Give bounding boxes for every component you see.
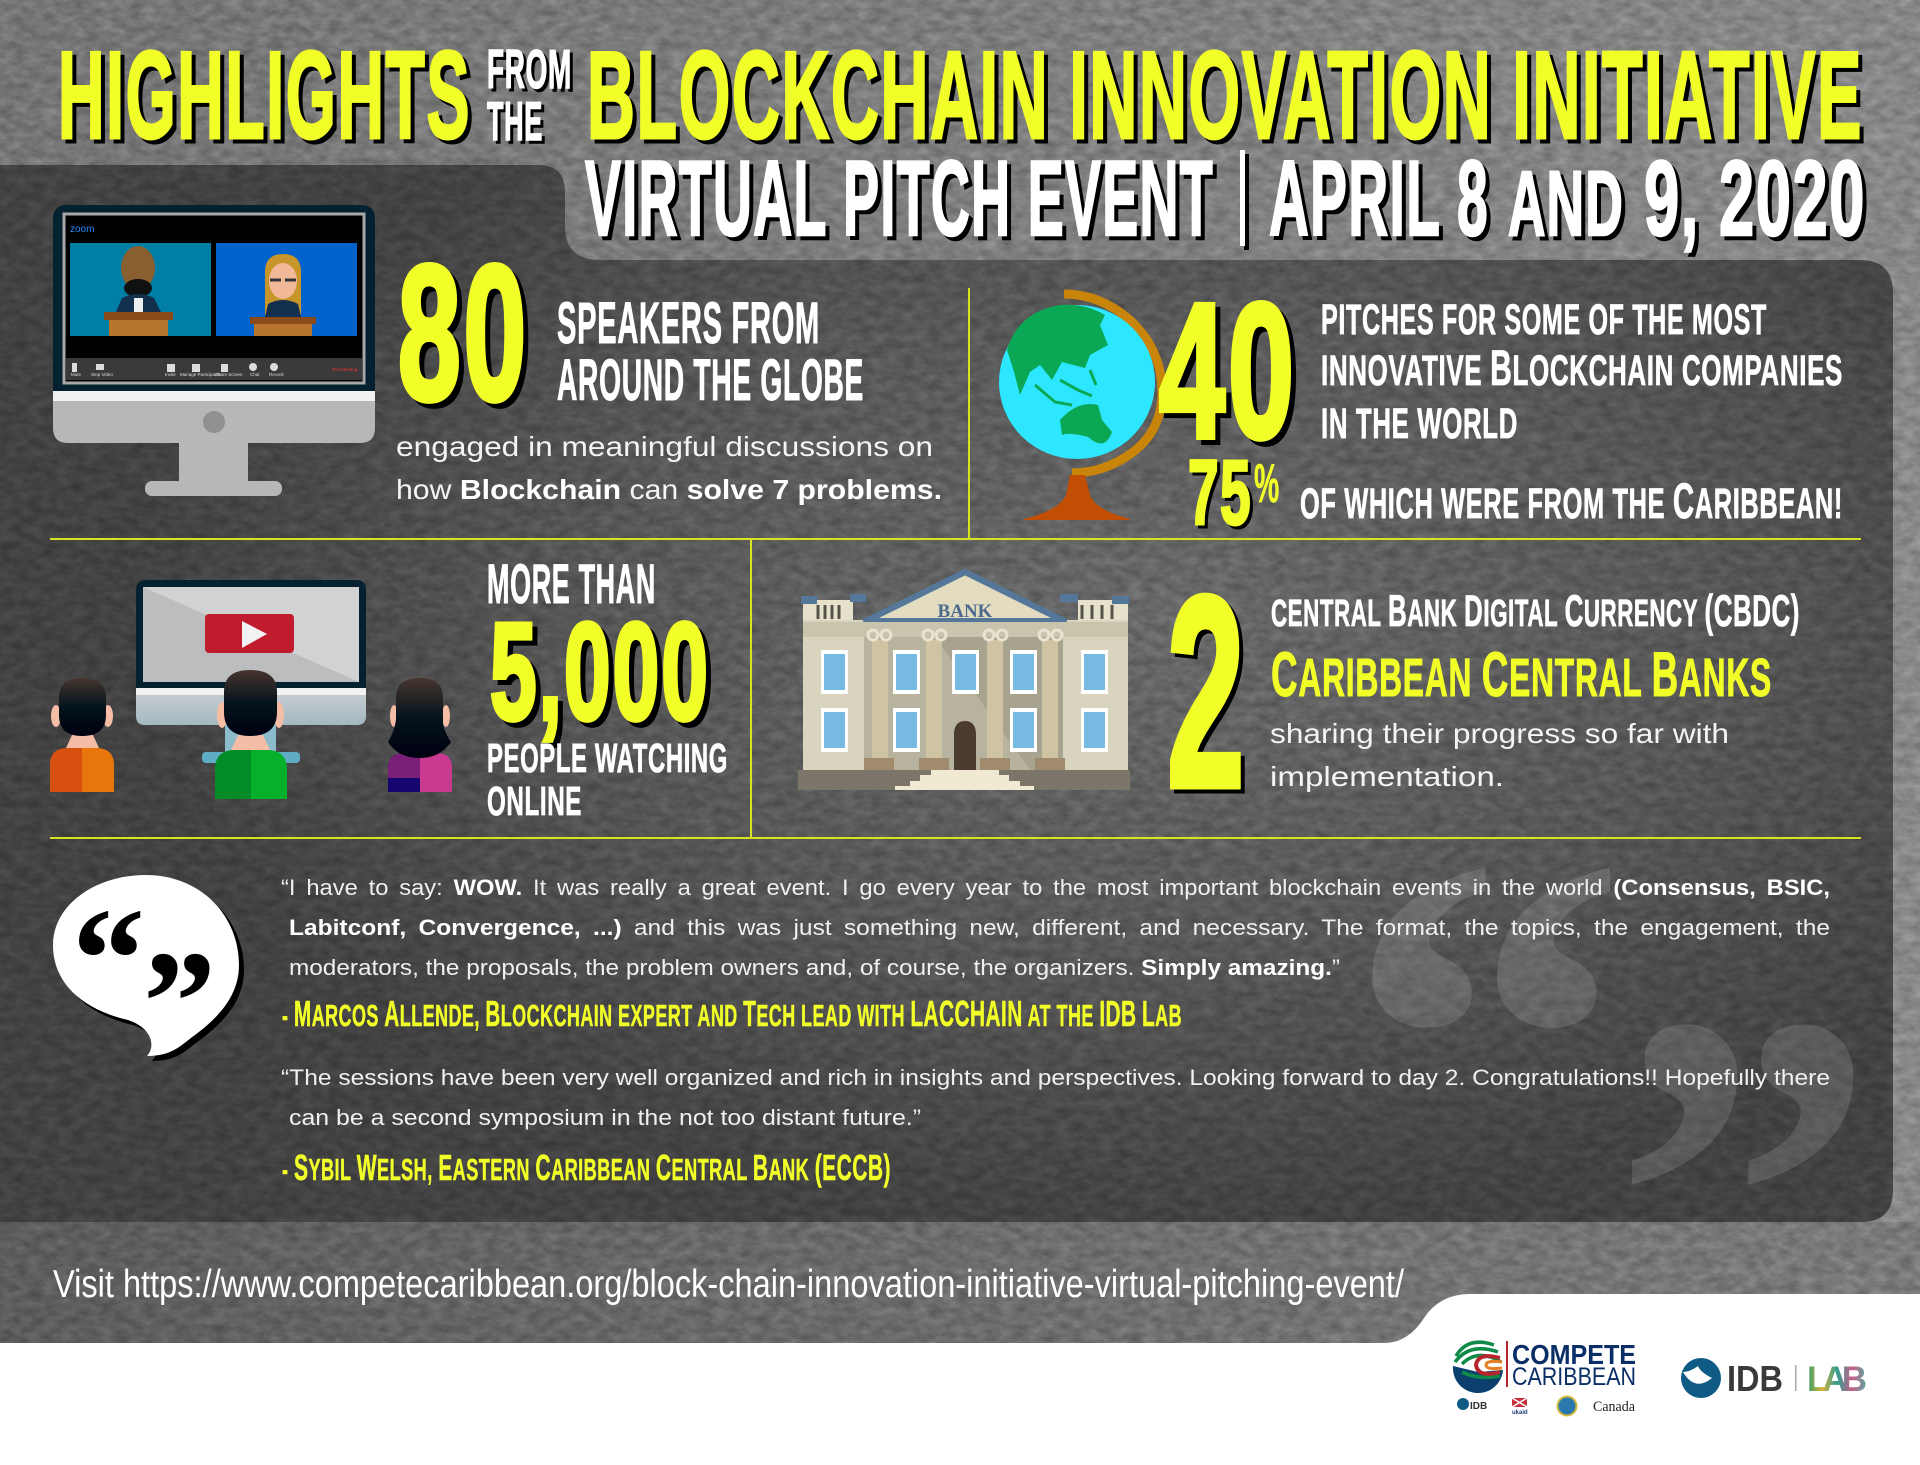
stat: 40 pitches: IN THE WORLD	[1321, 400, 1518, 448]
testimonial one: moderators, the proposals, the problem owners and, of course, the organizers. Simply amazing. ”	[289, 955, 1340, 980]
footer white area	[0, 1294, 1920, 1465]
icon: audience watching video	[50, 580, 452, 799]
icon: video call monitor	[53, 205, 375, 496]
stat: 75 percent	[1188, 442, 1843, 544]
logo: Compete Caribbean: COMPETE	[1512, 1339, 1636, 1370]
stat: 2 central bank digital currency: CARIBBEAN CENTRAL BANKS	[1271, 640, 1772, 710]
viewer left	[50, 678, 114, 792]
testimonial two: “The sessions have been very well organized and rich in insights and perspectives. Looking forward to day 2. Congratulations!! Hopefully there	[281, 1065, 1830, 1090]
icon: speech bubble quote	[53, 875, 239, 1083]
title: THE	[487, 90, 543, 152]
stat: 40 pitches	[1159, 263, 1843, 478]
toolbar labels: Chat	[250, 372, 260, 377]
viewer right	[388, 678, 452, 792]
toolbar labels: Mute	[71, 372, 82, 377]
toolbar labels: Share Screen	[215, 372, 243, 377]
title: FROM	[487, 38, 572, 100]
logo: IDB Lab: IDB	[1727, 1358, 1783, 1399]
speaker one	[104, 246, 173, 336]
testimonial two: can be a second symposium in the not too distant future.”	[289, 1105, 921, 1130]
toolbar labels	[71, 363, 358, 377]
testimonial one: “I have to say: WOW. It was really a great event. I go every year to the most important blockchain events in the world (Consensus, BSIC,	[281, 875, 1830, 900]
toolbar labels: Manage Participants	[180, 372, 222, 377]
stat: 2 central bank digital currency: implementation.	[1270, 761, 1504, 792]
toolbar labels: Invite	[165, 372, 176, 377]
title	[58, 27, 1863, 165]
testimonial one	[281, 875, 1830, 1034]
stat: 5,000 people: MORE THAN	[487, 552, 656, 615]
stat: 2 central bank digital currency	[1167, 540, 1800, 844]
icon: video call monitor: zoom	[70, 224, 94, 235]
dividers	[50, 288, 1861, 838]
partner logos: IDB	[1470, 1401, 1487, 1412]
icon: speech bubble quote: “	[72, 878, 145, 1040]
stat: 80 speakers: 80	[398, 225, 529, 440]
speaker two	[250, 254, 316, 336]
logo: Compete Caribbean	[1453, 1339, 1636, 1416]
logo: Compete Caribbean: CARIBBEAN	[1512, 1363, 1636, 1391]
stat: 40 pitches: 40	[1159, 263, 1297, 478]
toolbar labels: Stop Video	[91, 372, 113, 377]
icon: bank building: BANK	[938, 601, 993, 622]
subtitle: VIRTUAL PITCH EVENT	[585, 138, 1214, 258]
stat: 80 speakers: engaged in meaningful discussions on	[396, 431, 933, 462]
icon: bank building	[798, 572, 1130, 790]
stat: 5,000 people	[487, 552, 728, 824]
testimonial two	[281, 1065, 1830, 1188]
testimonial one: Labitconf, Convergence, ...) and this was just something new, different, and necessary. The format, the topics, the engagement, the	[289, 915, 1830, 940]
stat: 80 speakers: SPEAKERS FROM	[557, 291, 820, 356]
testimonial one: - MARCOS ALLENDE, BLOCKCHAIN EXPERT AND TECH LEAD WITH LACCHAIN AT THE IDB LAB	[282, 993, 1182, 1034]
background quotation marks	[1345, 748, 1877, 1465]
partner logos: ukaid	[1512, 1410, 1528, 1416]
stat: 75 percent: %	[1254, 452, 1280, 514]
stat: 2 central bank digital currency: CENTRAL BANK DIGITAL CURRENCY (CBDC)	[1271, 587, 1800, 636]
stat: 2 central bank digital currency: sharing their progress so far with	[1270, 718, 1729, 749]
stat: 5,000 people: ONLINE	[487, 778, 582, 824]
stat: 80 speakers: AROUND THE GLOBE	[557, 348, 864, 413]
stat: 5,000 people: 5,000	[490, 595, 710, 749]
viewer centre	[215, 670, 287, 799]
website link: Visit https://www.competecaribbean.org/block-chain-innovation-initiative-virtual-pitching-event/	[53, 1263, 1404, 1306]
title: HIGHLIGHTS	[58, 27, 471, 165]
stat: 80 speakers: how Blockchain can solve 7 problems.	[396, 474, 942, 505]
logo: IDB Lab	[1681, 1358, 1867, 1399]
testimonial two: - SYBIL WELSH, EASTERN CARIBBEAN CENTRAL BANK (ECCB)	[282, 1147, 891, 1188]
icon: play button	[205, 614, 294, 653]
subtitle: APRIL 8	[1269, 138, 1489, 258]
toolbar labels: Record	[269, 372, 284, 377]
partner logos: Canada	[1593, 1399, 1635, 1415]
stat: 5,000 people: PEOPLE WATCHING	[487, 735, 728, 781]
toolbar labels: End Meeting	[332, 367, 358, 372]
background quotation marks: “	[1345, 748, 1629, 1335]
partner logos	[1457, 1396, 1635, 1416]
icon: globe	[999, 294, 1162, 520]
logo: IDB Lab: LAB	[1807, 1360, 1867, 1399]
icon: speech bubble quote: ”	[143, 921, 216, 1083]
stat: 75 percent: 75	[1188, 442, 1252, 544]
stat: 2 central bank digital currency: 2	[1167, 540, 1248, 844]
subtitle: AND	[1508, 153, 1624, 255]
stat: 80 speakers	[396, 225, 942, 505]
